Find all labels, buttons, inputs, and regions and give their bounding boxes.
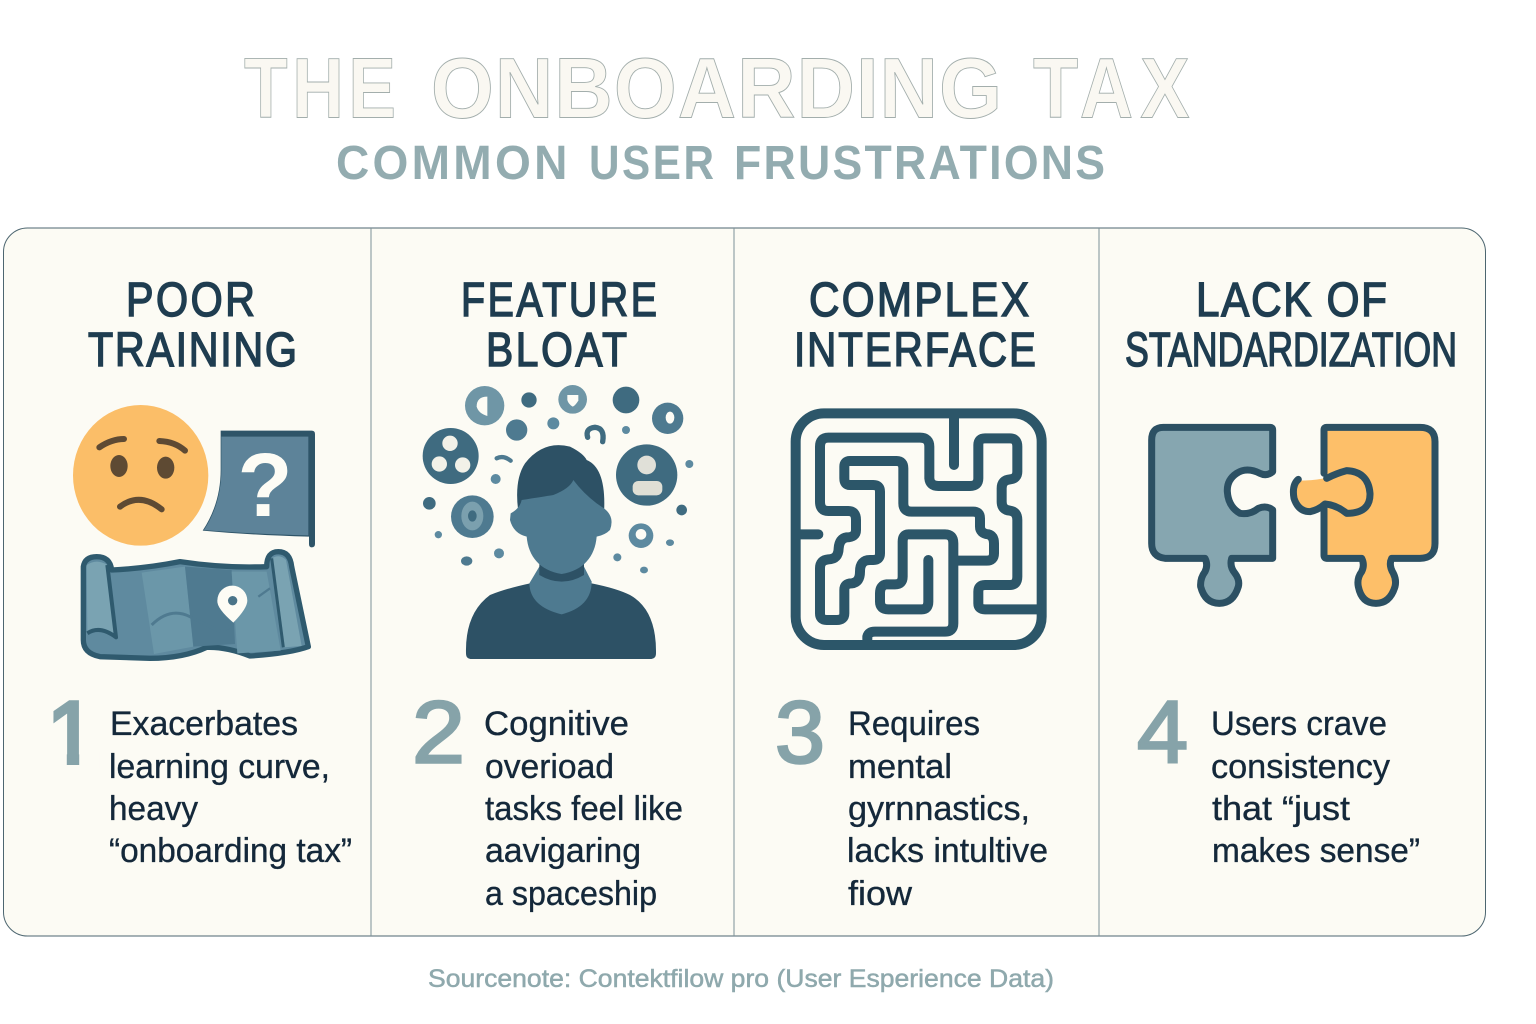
heading: poor training: TRAINING — [88, 323, 297, 377]
heading: feature bloat: FEATURE — [461, 273, 657, 327]
text block: feature bloat: overioad — [485, 748, 614, 786]
heading: complex interface: COMPLEX — [809, 272, 1029, 327]
subtitle: FRUSTRATIONS — [734, 136, 1105, 189]
heading: poor training: POOR — [126, 273, 255, 327]
text block: poor training: learning curve, — [109, 748, 330, 786]
text block: poor training: heavy — [109, 790, 198, 828]
heading: lack of standardization: LACK OF — [1196, 272, 1387, 327]
icon: map — [83, 552, 308, 658]
subtitle: USER — [589, 135, 714, 190]
subtitle: COMMON — [336, 135, 567, 189]
title: TAX — [1033, 41, 1190, 136]
icon: orange puzzle piece — [1293, 427, 1435, 603]
bubbles — [423, 385, 693, 573]
person silhouette — [466, 445, 656, 659]
panel: feature bloat — [412, 273, 693, 913]
title: THE — [244, 41, 396, 136]
number 1: 1 — [47, 683, 96, 782]
text block: complex interface: Requires — [848, 705, 980, 743]
number 4: 4 — [1137, 682, 1188, 782]
text block: feature bloat: tasks feel like — [485, 790, 683, 828]
heading: feature bloat — [461, 273, 657, 377]
text block: lack of standardization: makes sense” — [1212, 832, 1420, 870]
text block: complex interface: gyrnnastics, — [848, 790, 1030, 828]
text block: complex interface — [847, 705, 1048, 913]
panel: card background — [4, 228, 1486, 936]
heading: lack of standardization — [1125, 272, 1457, 377]
text block: lack of standardization — [1211, 705, 1420, 870]
panel: lack of standardization — [1125, 272, 1457, 870]
text block: lack of standardization: Users crave — [1211, 705, 1387, 743]
heading: complex interface: INTERFACE — [794, 324, 1036, 377]
icon: question speech bubble: ? — [238, 436, 292, 536]
number 3: 3 — [775, 682, 825, 782]
heading: feature bloat: BLOAT — [486, 324, 627, 377]
icon: blue puzzle piece — [1152, 427, 1273, 603]
icon: sad face — [73, 405, 208, 546]
text block: feature bloat — [484, 705, 683, 913]
text block: complex interface: lacks intultive — [847, 832, 1048, 870]
text block: complex interface: fiow — [848, 875, 912, 913]
text block: feature bloat: aavigaring — [485, 832, 641, 870]
text block: lack of standardization: consistency — [1211, 748, 1390, 786]
heading: poor training — [88, 273, 297, 377]
text block: lack of standardization: that “just — [1212, 790, 1351, 828]
panel: complex interface — [775, 272, 1048, 913]
icon: overwhelmed person with bubbles — [423, 385, 693, 659]
text block: poor training: “onboarding tax” — [109, 832, 352, 870]
icon: maze — [796, 413, 1042, 645]
text block: complex interface: mental — [848, 748, 952, 786]
number 2: 2 — [412, 682, 465, 782]
heading: complex interface — [794, 272, 1036, 377]
text block: poor training — [109, 705, 352, 870]
icon: question speech bubble — [203, 431, 315, 547]
subtitle — [336, 135, 1105, 190]
source note: Sourcenote: Contektfilow pro (User Esperience Data) — [428, 965, 1054, 993]
title: ONBOARDING — [431, 41, 1002, 136]
title — [244, 41, 1190, 136]
panel: poor training — [44, 273, 352, 870]
text block: feature bloat: a spaceship — [485, 875, 657, 913]
text block: feature bloat: Cognitive — [484, 705, 629, 743]
text block: poor training: Exacerbates — [110, 705, 298, 743]
